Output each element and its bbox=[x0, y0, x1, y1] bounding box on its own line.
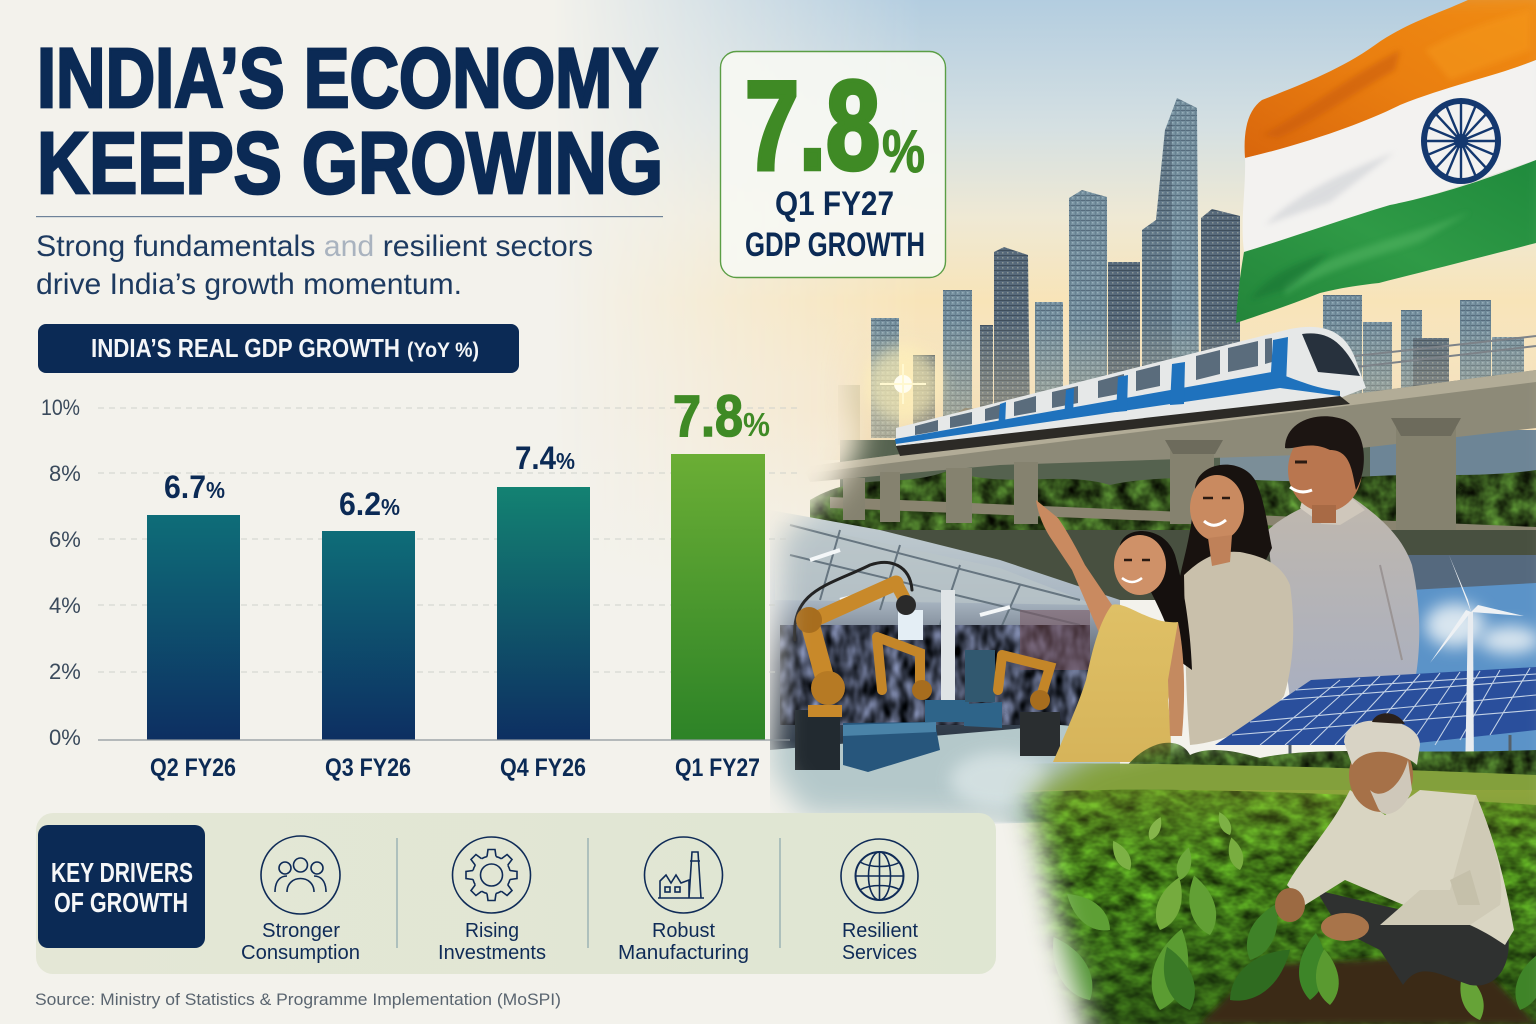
robot arm 3 bbox=[998, 655, 1050, 700]
saffron band bbox=[1245, 0, 1536, 158]
driver: stronger consumption: Consumption bbox=[241, 942, 360, 964]
elevated viaduct bbox=[803, 336, 1536, 530]
photo collage: city, factory, family, energy and farm bbox=[770, 0, 1536, 830]
machines bbox=[843, 722, 940, 772]
skyline bbox=[820, 98, 1536, 460]
crop foliage bbox=[990, 790, 1536, 1024]
category labels: Q2 FY26 bbox=[150, 754, 236, 782]
value labels: 6.7 bbox=[164, 469, 206, 505]
category labels: Q1 FY27 bbox=[675, 754, 760, 782]
title bbox=[37, 31, 663, 212]
callout: headline GDP figure: 7.8 bbox=[745, 55, 880, 196]
driver: stronger consumption: Stronger bbox=[262, 920, 340, 942]
callout: headline GDP figure: % bbox=[882, 118, 925, 185]
bar: Q4 FY26 bbox=[497, 487, 590, 740]
leaves bbox=[1041, 810, 1536, 1023]
bar: Q2 FY26 bbox=[147, 515, 240, 740]
panel: key drivers of growth bbox=[36, 813, 996, 974]
driver: stronger consumption bbox=[241, 836, 360, 964]
chart heading: (YoY %) bbox=[407, 339, 479, 362]
value labels: % bbox=[743, 406, 770, 443]
raised arm bbox=[1036, 500, 1112, 635]
title divider bbox=[36, 216, 663, 217]
icon: globe bbox=[841, 839, 918, 913]
callout: headline GDP figure bbox=[720, 52, 946, 278]
key drivers label: OF GROWTH bbox=[54, 887, 188, 918]
windshield bbox=[1302, 333, 1360, 376]
farmer bbox=[1275, 713, 1514, 1006]
icon: gear bbox=[452, 837, 530, 913]
category labels bbox=[150, 754, 760, 782]
callout: headline GDP figure: GDP GROWTH bbox=[745, 226, 925, 264]
green band bbox=[1236, 160, 1536, 323]
girl bbox=[1036, 500, 1192, 762]
windows bbox=[915, 338, 1272, 435]
driver: resilient services: Services bbox=[842, 942, 917, 964]
title: KEEPS GROWING bbox=[37, 115, 663, 212]
chart heading bbox=[38, 324, 519, 373]
driver: resilient services: Resilient bbox=[842, 920, 918, 942]
chart heading: INDIA’S REAL GDP GROWTH bbox=[91, 333, 400, 363]
y axis labels bbox=[41, 395, 81, 750]
category labels: Q4 FY26 bbox=[500, 754, 586, 782]
y axis labels: 0% bbox=[49, 725, 81, 750]
driver: resilient services bbox=[841, 839, 918, 964]
blue stripe bbox=[895, 372, 1340, 444]
y axis labels: 2% bbox=[49, 659, 81, 684]
doors bbox=[998, 337, 1288, 428]
hands bbox=[1275, 888, 1305, 922]
driver: rising investments: Investments bbox=[438, 942, 546, 964]
y axis labels: 4% bbox=[49, 593, 81, 618]
robot arm 2 bbox=[877, 637, 920, 690]
sky fade to page colour bbox=[0, 410, 1536, 590]
indian flag bbox=[1236, 0, 1536, 323]
sun glow bbox=[865, 346, 941, 422]
icon: people bbox=[261, 836, 340, 914]
lower cityscape and trees bbox=[800, 430, 1536, 605]
driver: robust manufacturing: Robust bbox=[652, 920, 715, 942]
y axis labels: 10% bbox=[41, 395, 80, 420]
metro train bbox=[895, 327, 1366, 456]
subtitle bbox=[36, 230, 593, 301]
soil bbox=[1200, 955, 1536, 1024]
factory scene bbox=[770, 510, 1120, 830]
value labels: 7.4 bbox=[515, 440, 556, 476]
sky backdrop bbox=[598, 0, 1536, 522]
y axis labels: 6% bbox=[49, 527, 81, 552]
value labels: % bbox=[206, 477, 225, 503]
shirt bbox=[1287, 790, 1514, 945]
value labels: % bbox=[556, 448, 575, 474]
bar chart: real GDP growth bbox=[41, 384, 800, 782]
tree line bbox=[1128, 742, 1536, 775]
ashoka chakra bbox=[1423, 101, 1499, 181]
bar: Q1 FY27 bbox=[671, 454, 765, 740]
value labels: % bbox=[381, 494, 400, 520]
wind turbine bbox=[1430, 556, 1524, 752]
turban bbox=[1344, 721, 1420, 765]
trousers bbox=[1316, 890, 1509, 986]
value labels bbox=[164, 384, 770, 522]
driver: robust manufacturing: Manufacturing bbox=[618, 942, 749, 964]
key drivers label bbox=[38, 825, 205, 948]
icon: factory bbox=[644, 837, 722, 913]
wind turbine sky bbox=[1410, 583, 1536, 760]
value labels: 7.8 bbox=[673, 384, 743, 449]
face and beard bbox=[1349, 738, 1413, 812]
family bbox=[1036, 416, 1419, 762]
category labels: Q3 FY26 bbox=[325, 754, 411, 782]
source note: Source: Ministry of Statistics & Programme Implementation (MoSPI) bbox=[35, 990, 561, 1009]
key drivers label: KEY DRIVERS bbox=[51, 857, 193, 888]
subtitle: drive India’s growth momentum. bbox=[36, 268, 462, 301]
callout: headline GDP figure: Q1 FY27 bbox=[775, 185, 894, 223]
driver: rising investments: Rising bbox=[465, 920, 519, 942]
driver: rising investments bbox=[438, 837, 546, 964]
farm field with tree line bbox=[990, 743, 1536, 1024]
value labels: 6.2 bbox=[339, 486, 381, 522]
title: INDIA’S ECONOMY bbox=[37, 31, 658, 125]
grass strip bbox=[1014, 763, 1536, 805]
subtitle: Strong fundamentals and resilient sectors bbox=[36, 230, 593, 263]
floor bbox=[770, 725, 1120, 825]
solar panels bbox=[1215, 667, 1536, 754]
y axis labels: 8% bbox=[49, 461, 81, 486]
white band bbox=[1243, 60, 1536, 252]
driver: robust manufacturing bbox=[618, 837, 749, 964]
robot arm 1 bbox=[795, 562, 912, 690]
woman bbox=[1178, 465, 1293, 745]
bar: Q3 FY26 bbox=[322, 531, 415, 740]
man bbox=[1268, 416, 1419, 700]
